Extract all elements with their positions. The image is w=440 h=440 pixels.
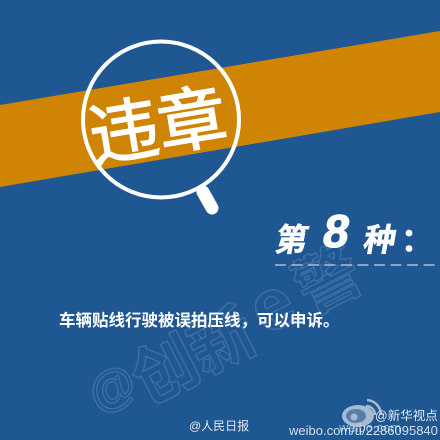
watermark: 创新e警 <box>79 233 374 423</box>
dashed divider <box>275 264 440 266</box>
watermark: 创新e警: @ <box>79 354 145 423</box>
magnifier ring <box>83 42 239 198</box>
heading: 第8种: 第 <box>273 222 311 258</box>
watermark: 创新e警: e <box>236 261 308 350</box>
credit: 人民日报: @人民日报 <box>189 418 249 433</box>
icon: magnifying glass <box>83 42 239 208</box>
credit: overlapping weibo url: weibo.com <box>338 420 401 435</box>
credit: weibo url: weibo.com/u/2286095840 <box>288 423 438 438</box>
weibo logo <box>342 400 381 427</box>
watermark: 创新e警: 创 <box>120 323 211 418</box>
headline: 违章: 违章 <box>84 77 233 176</box>
heading: 第8种: 8 <box>319 205 354 257</box>
credit: 新华视点: @新华视点 <box>375 408 438 423</box>
watermark: 创新e警: 警 <box>283 233 374 328</box>
body text: 车辆贴线行驶被误拍压线，可以申诉。 <box>59 310 340 330</box>
watermark: 创新e警: 新 <box>177 294 268 389</box>
magnifier handle <box>203 192 212 208</box>
heading: 第8种: 种 <box>361 222 399 258</box>
heading: 第8种 <box>273 205 433 258</box>
gold diagonal band <box>0 31 440 187</box>
heading: 第8种: ： <box>401 222 433 258</box>
